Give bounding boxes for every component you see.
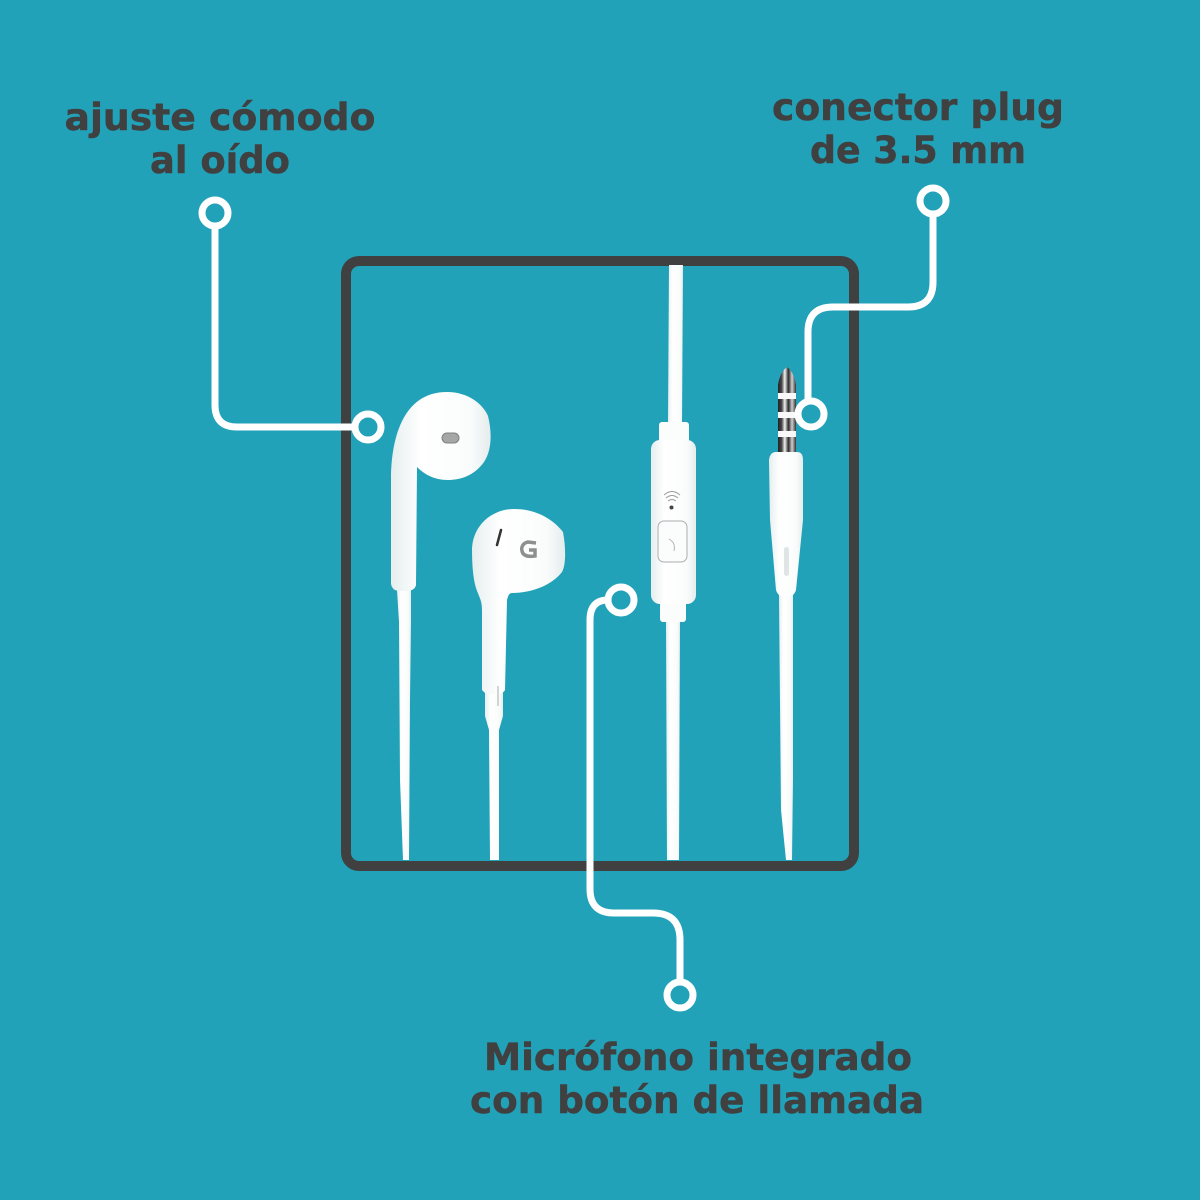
heading: ear fit <box>64 96 376 182</box>
product frame <box>346 261 854 866</box>
black slit <box>497 530 501 545</box>
microphone remote and cable <box>651 265 696 860</box>
heading: microphone <box>470 1036 924 1122</box>
leader line <box>590 600 680 982</box>
call button <box>658 521 687 562</box>
heading: plug connector <box>772 86 1064 172</box>
heading: ear fit: al oído <box>150 139 290 182</box>
callout: microphone <box>590 587 693 1008</box>
marker top <box>608 587 634 613</box>
heading: microphone: con botón de llamada <box>470 1079 924 1122</box>
logo mark <box>522 542 536 556</box>
callout: plug connector <box>798 188 946 427</box>
3.5 mm jack and cable <box>769 367 803 860</box>
grip slot <box>784 547 789 576</box>
callout: ear fit <box>202 200 381 440</box>
heading: plug connector: conector plug <box>772 86 1064 129</box>
heading: plug connector: de 3.5 mm <box>810 129 1026 172</box>
left earbud, large <box>391 392 491 860</box>
marker top <box>202 200 228 226</box>
marker bottom <box>667 982 693 1008</box>
wifi-style mic icon <box>664 492 680 509</box>
leader line <box>215 226 355 427</box>
marker bottom <box>798 401 824 427</box>
metal plug <box>778 367 796 452</box>
marker top <box>920 188 946 214</box>
marker bottom <box>355 414 381 440</box>
speaker slot <box>442 433 459 443</box>
stem seam <box>497 686 499 706</box>
heading: ear fit: ajuste cómodo <box>64 96 376 139</box>
right earbud, small <box>472 509 565 860</box>
leader line <box>808 214 933 401</box>
heading: microphone: Micrófono integrado <box>484 1036 912 1079</box>
